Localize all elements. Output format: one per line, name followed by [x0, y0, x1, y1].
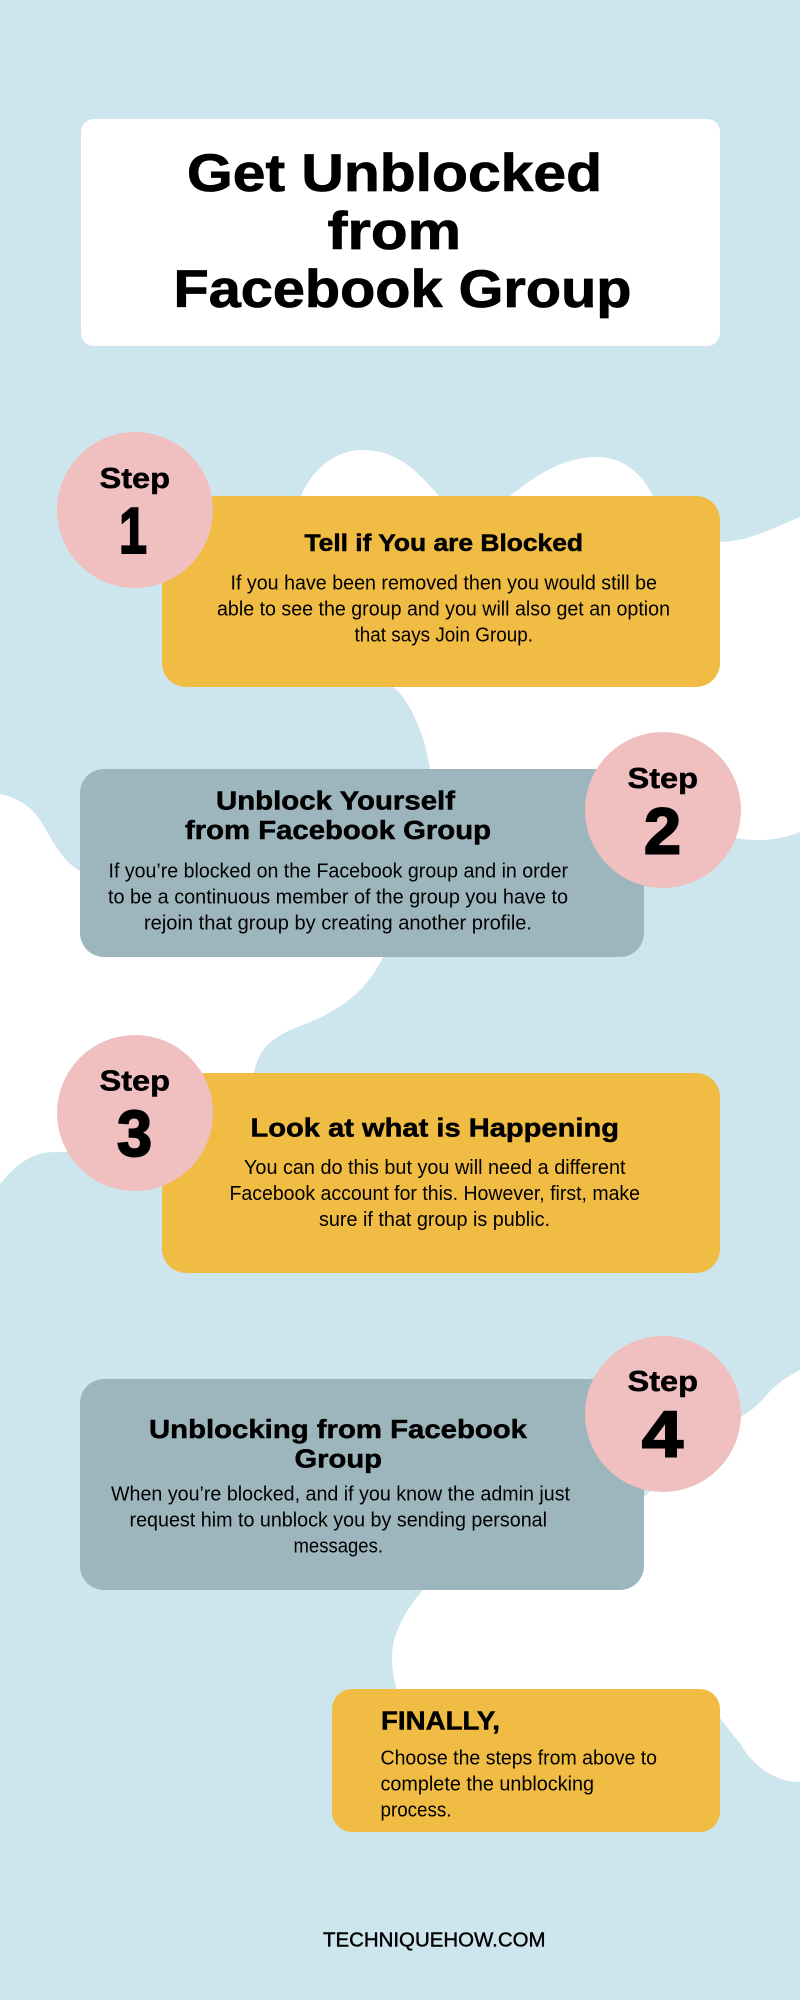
step 3 heading: Look at what is Happening — [250, 1112, 619, 1142]
step 2 heading: from Facebook Group — [185, 817, 491, 845]
step 3 body text — [230, 1157, 640, 1231]
step 1 badge — [57, 432, 213, 588]
step 4 heading: Group — [294, 1444, 382, 1474]
step 4 heading — [149, 1414, 528, 1474]
title heading — [174, 144, 632, 319]
step 3 badge: 3 — [117, 1097, 152, 1170]
step 2 heading — [185, 788, 491, 845]
title panel — [81, 119, 720, 346]
step 1 heading: Tell if You are Blocked — [304, 530, 583, 557]
step 3 body text: sure if that group is public. — [319, 1209, 550, 1231]
step 2 heading: Unblock Yourself — [216, 788, 456, 816]
finally body text: process. — [380, 1800, 452, 1822]
step 3 badge — [57, 1035, 213, 1191]
step 4 body text: request him to unblock you by sending personal — [130, 1510, 547, 1532]
step 1 badge: Step — [100, 463, 170, 495]
step 3 body text: You can do this but you will need a different — [244, 1157, 626, 1179]
panel: step 3 — [57, 1035, 720, 1273]
finally body text — [380, 1748, 657, 1822]
step 4 body text — [111, 1484, 570, 1558]
background: white upper blob — [0, 450, 800, 1184]
finally body text: complete the unblocking — [380, 1774, 594, 1796]
step 4 body text: When you’re blocked, and if you know the admin just — [111, 1484, 570, 1506]
step 2 body text — [108, 860, 568, 934]
footer website: TECHNIQUEHOW.COM — [323, 1930, 546, 1952]
panel: step 2 — [80, 732, 741, 957]
step 4 badge: 4 — [642, 1398, 683, 1470]
step 1 badge: 1 — [119, 494, 147, 567]
step 1 body text: able to see the group and you will also get an option — [217, 598, 670, 620]
panel: finally — [332, 1689, 720, 1832]
step 1 body text: If you have been removed then you would still be — [230, 572, 657, 594]
step 2 badge: 2 — [644, 794, 681, 868]
background: white lower blob — [392, 1370, 800, 1782]
title heading: Get Unblocked — [187, 144, 602, 203]
panel: step 4 — [80, 1336, 741, 1590]
step 2 body text: to be a continuous member of the group you have to — [108, 886, 568, 908]
step 2 badge — [585, 732, 741, 888]
finally body text: Choose the steps from above to — [380, 1748, 657, 1770]
panel: step 1 — [57, 432, 720, 687]
step 2 badge: Step — [628, 763, 698, 795]
step 3 body text: Facebook account for this. However, first, make — [230, 1183, 640, 1205]
step 1 body text: that says Join Group. — [354, 624, 533, 646]
step 3 badge: Step — [100, 1066, 170, 1098]
step 4 body text: messages. — [294, 1536, 383, 1558]
finally heading: FINALLY, — [381, 1706, 500, 1736]
step 2 body text: If you’re blocked on the Facebook group and in order — [108, 860, 568, 882]
title heading: from — [328, 202, 461, 261]
step 4 badge: Step — [628, 1366, 698, 1398]
step 1 body text — [217, 572, 670, 646]
title heading: Facebook Group — [174, 260, 632, 319]
step 2 body text: rejoin that group by creating another profile. — [144, 912, 532, 934]
step 4 heading: Unblocking from Facebook — [149, 1414, 528, 1444]
step 4 badge — [585, 1336, 741, 1492]
